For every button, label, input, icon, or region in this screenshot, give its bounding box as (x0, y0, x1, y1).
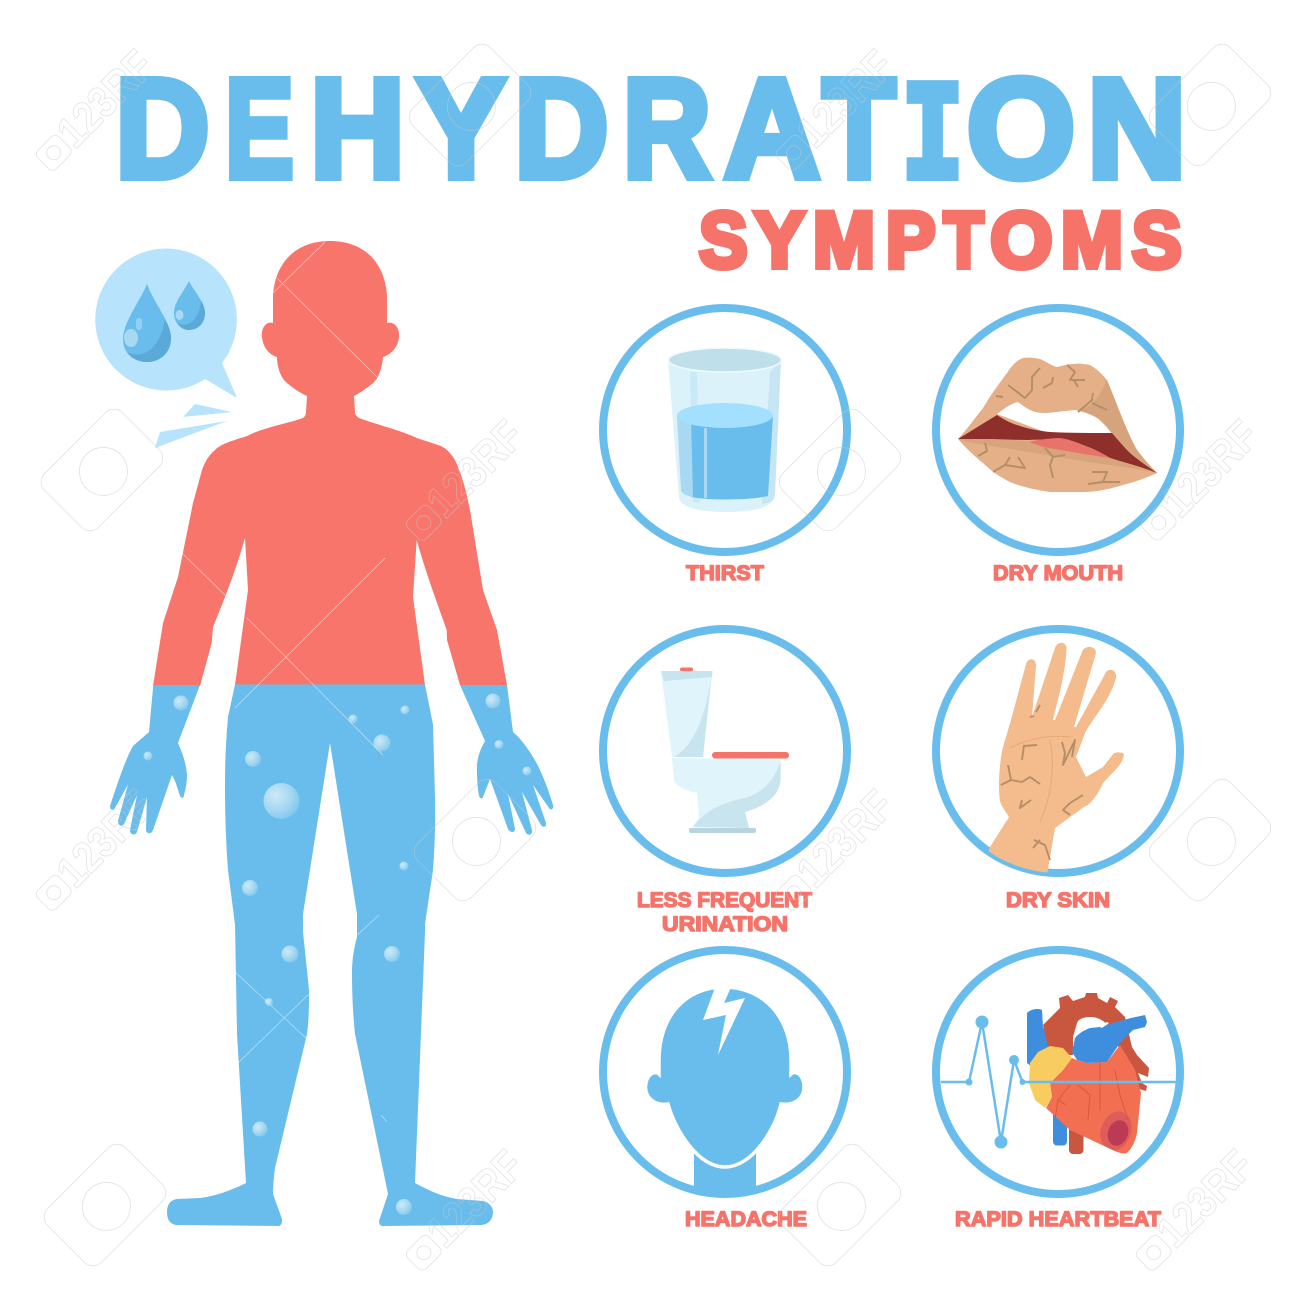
ring (603, 629, 847, 873)
label: rapid heartbeat: RAPID HEARTBEAT (955, 1207, 1161, 1231)
icon: cracked hand (985, 643, 1124, 875)
subtitle: O (990, 195, 1052, 284)
label: dry skin: DRY SKIN (1006, 888, 1110, 912)
panel: rapid heartbeat (936, 950, 1180, 1231)
water bubbles (144, 694, 532, 1215)
title: T (823, 49, 896, 207)
icon: toilet (661, 668, 789, 833)
text: 123RF (417, 411, 533, 527)
upper body: dehydrated red (153, 241, 507, 686)
ring (603, 308, 847, 552)
speech bubble with water drops (95, 248, 237, 398)
text: 123RF (1152, 411, 1268, 527)
text: 123RF (787, 41, 903, 157)
title: H (310, 49, 405, 207)
icon: cracked lips (958, 358, 1157, 492)
subtitle: T (944, 195, 983, 284)
subtitle: Y (754, 195, 805, 284)
small drop (174, 281, 205, 330)
text: 123RF (417, 1141, 533, 1257)
title: A (724, 49, 820, 207)
subtitle: P (886, 195, 935, 284)
icon: glass of water (668, 348, 782, 512)
title: Y (417, 49, 505, 207)
label: less frequent urination (637, 888, 812, 936)
title: R (623, 49, 711, 207)
ring (936, 950, 1180, 1194)
title: N (1087, 49, 1186, 207)
panel: dry mouth (936, 308, 1180, 585)
bubble (95, 248, 237, 398)
panel: headache (603, 950, 847, 1231)
lower body and hands: water blue (167, 684, 493, 1226)
title: D (514, 49, 609, 207)
subtitle: M (1061, 195, 1123, 284)
text: 123RF (1147, 1141, 1263, 1257)
panel: thirst (603, 308, 847, 585)
large drop (123, 284, 171, 362)
text: 123RF (787, 781, 903, 897)
title: D (115, 49, 210, 207)
subtitle: M (813, 195, 875, 284)
title: O (967, 49, 1075, 207)
label: less frequent urination: LESS FREQUENT (637, 888, 812, 912)
icon: head with lightning (646, 985, 804, 1200)
panel: dry skin (936, 629, 1180, 912)
icon: anatomical heart (1027, 993, 1149, 1155)
ring (936, 629, 1180, 873)
body figure (110, 241, 553, 1226)
label: less frequent urination: URINATION (662, 912, 788, 936)
text: 123RF (47, 41, 163, 157)
icon: pulse line (941, 1016, 1176, 1148)
shout lines (155, 404, 232, 448)
label: thirst: THIRST (686, 561, 764, 585)
text: 123RF (47, 781, 163, 897)
subtitle: S (699, 195, 747, 284)
label: dry mouth: DRY MOUTH (993, 561, 1123, 585)
panel: less frequent urination (603, 629, 847, 936)
subtitle: S (1132, 195, 1182, 284)
ring (936, 308, 1180, 552)
ring (603, 950, 847, 1194)
title: E (225, 49, 294, 207)
label: headache: HEADACHE (685, 1207, 807, 1231)
title: I (902, 61, 964, 220)
